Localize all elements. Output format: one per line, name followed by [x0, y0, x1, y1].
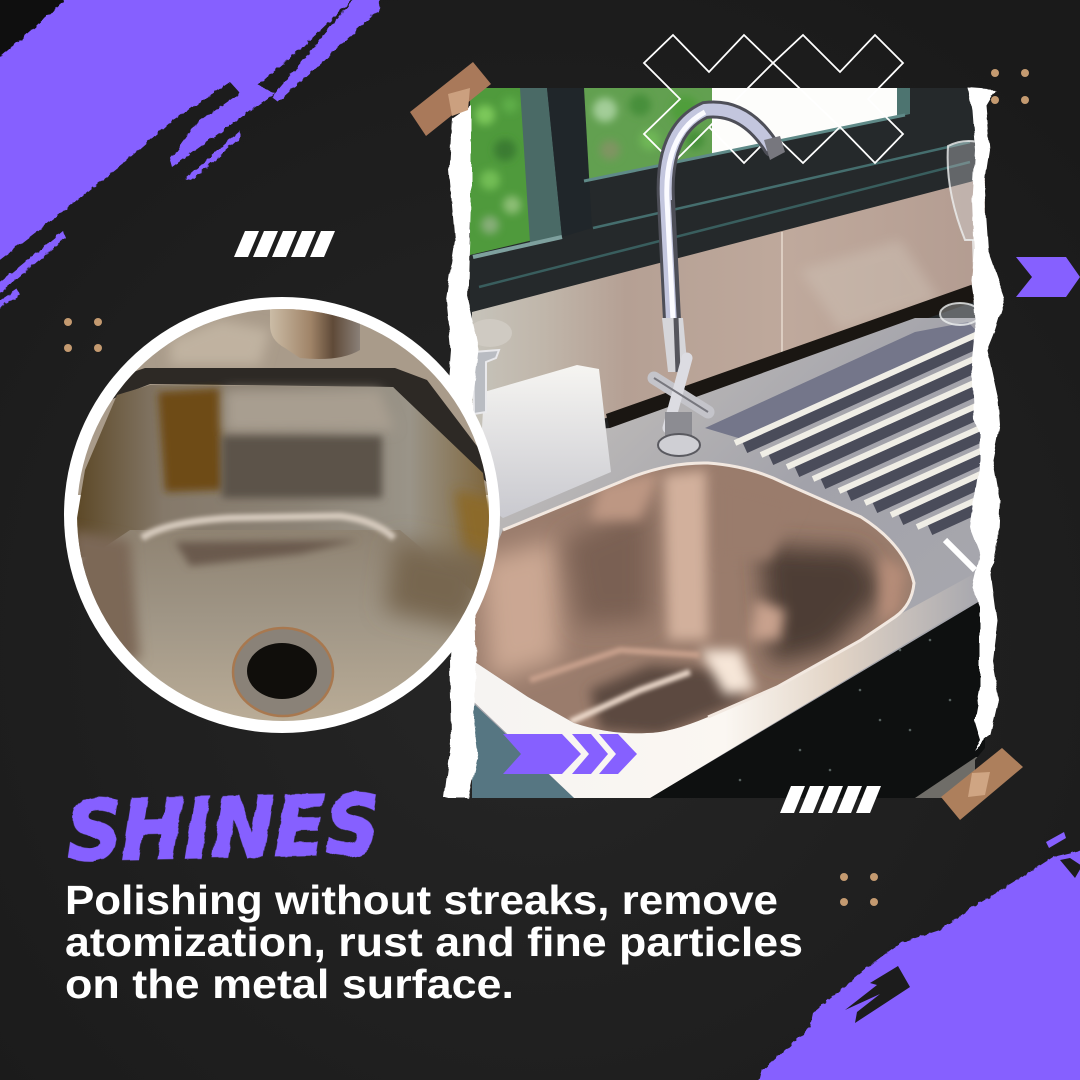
- faucet: [654, 109, 785, 456]
- white slanted bars top: [234, 231, 335, 257]
- diamond outline pattern: [644, 35, 903, 163]
- tape top: [410, 62, 491, 136]
- back wall and collar: [70, 305, 500, 495]
- dot grids: [64, 69, 1029, 906]
- drain: [233, 628, 333, 716]
- soap dispenser: [473, 350, 611, 518]
- torn white edge right: [968, 88, 1005, 750]
- torn white edge left: [444, 105, 479, 798]
- heading: SHINES: [66, 778, 380, 880]
- tape bottom: [941, 748, 1023, 820]
- wall: [472, 178, 985, 428]
- window: [470, 88, 985, 328]
- description text: on the metal surface.: [65, 961, 514, 1007]
- circular before photo: [64, 297, 500, 733]
- white rim band: [472, 575, 978, 798]
- purple brush stroke top left: [0, 0, 380, 313]
- chevron arrow group: [503, 734, 637, 774]
- dark rim: [112, 368, 486, 482]
- drain grooves: [705, 322, 985, 570]
- steel counter: [472, 318, 985, 798]
- teal floor: [472, 702, 574, 798]
- panel: kitchen sink photo: [444, 35, 1005, 798]
- sink floor: [70, 516, 495, 730]
- description text: [65, 877, 803, 1007]
- description text: Polishing without streaks, remove: [65, 877, 778, 923]
- stained upper wall: [77, 382, 489, 610]
- description text: atomization, rust and fine particles: [65, 919, 803, 965]
- black stone counter: [650, 598, 985, 798]
- wine glass: [940, 141, 990, 325]
- white slanted bars bottom: [780, 786, 881, 813]
- sink bowl: [470, 460, 920, 740]
- purple arrow right edge: [1016, 257, 1080, 297]
- purple brush stroke bottom right: [756, 832, 1080, 1080]
